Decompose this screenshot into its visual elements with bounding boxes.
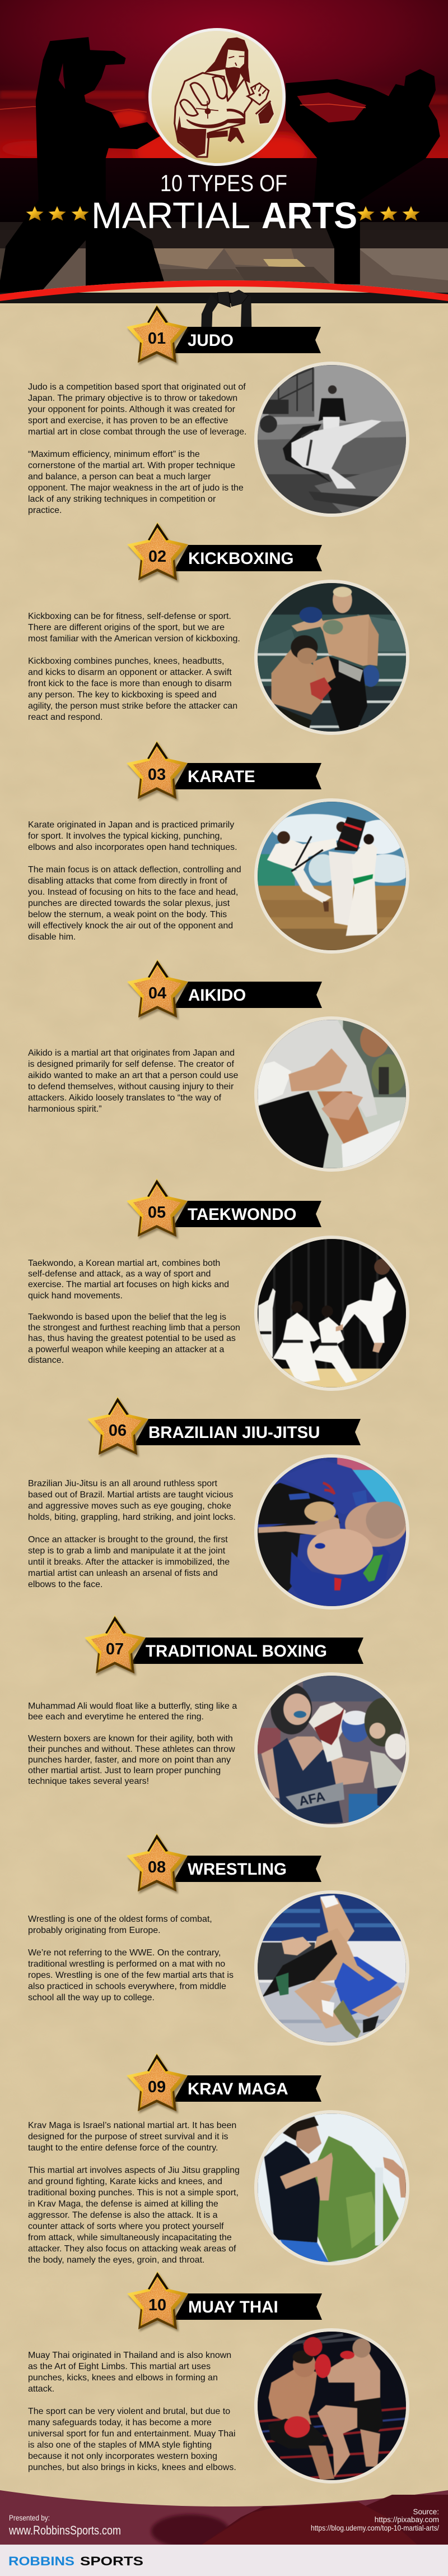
section 08 text: probably originating from Europe. (28, 1926, 161, 1935)
section 08 heading: WRESTLING (188, 1860, 287, 1879)
section 03 text: punches are directed towards the solar plexus, just (28, 899, 230, 908)
section 05 text: has, thus having the greatest potential to be used as (28, 1334, 236, 1343)
section 01 heading: JUDO (188, 331, 234, 350)
section 05 heading (127, 1178, 321, 1240)
section 08 heading (127, 1833, 321, 1894)
section 04 heading: 04 (148, 984, 166, 1002)
section 04 photo: aikido wrist lock (254, 1016, 409, 1172)
section 08 text: Wrestling is one of the oldest forms of combat, (28, 1914, 212, 1924)
section 03 photo: karate on beach (254, 798, 409, 954)
section 08 text: ropes. Wrestling is one of the few martial arts that is (28, 1971, 234, 1980)
section 05 text: distance. (28, 1356, 64, 1365)
section 01 text: your opponent for points. Although it was created for (28, 405, 235, 414)
section 03 heading (127, 741, 321, 802)
black belt band (0, 293, 448, 303)
section 09 text: This martial art involves aspects of Jiu Jitsu grappling (28, 2166, 240, 2175)
belt knot and tails (201, 290, 252, 327)
section 07 text: punches harder, faster, and more on point than any (28, 1755, 231, 1765)
section 03 text: disable him. (28, 932, 76, 942)
section 03 text: The main focus is on attack deflection, controlling and (28, 865, 241, 875)
section 07 text: Muhammad Ali would float like a butterfly, sting like a (28, 1701, 237, 1711)
parchment below curve (0, 280, 448, 306)
section 08 photo: wrestling takedown (254, 1890, 409, 2046)
section 09 text: counter attack of sorts where you protect yourself (28, 2222, 224, 2231)
section 06 text: elbows to the face. (28, 1580, 102, 1589)
section 02 text: and kicks to disarm an opponent or attacker. A swift (28, 668, 232, 677)
source credits (311, 2508, 439, 2532)
robbins sports logo: SPORTS (80, 2554, 143, 2568)
section 08 text: We’re not referring to the WWE. On the contrary, (28, 1948, 221, 1958)
section 10 text: is also one of the staples of MMA style fighting (28, 2440, 212, 2450)
section 05 heading: 05 (148, 1204, 166, 1222)
section 10 text: many safeguards today, it has become a more (28, 2418, 212, 2427)
section 03 heading: KARATE (188, 767, 255, 786)
section 08 heading: 08 (148, 1858, 166, 1876)
section 05 text: exercise. The martial art focuses on high kicks and (28, 1280, 229, 1289)
section 05 text: Taekwondo is based upon the belief that the leg is (28, 1312, 226, 1322)
section 06 text: step is to grab a limb and manipulate it at the joint (28, 1546, 225, 1556)
section 01 text: practice. (28, 506, 62, 515)
title line two: MARTIAL (91, 195, 250, 236)
section 07 photo: boxing bout: AFA (297, 1789, 326, 1809)
section 02 text: Kickboxing can be for fitness, self-defense or sport. (28, 612, 231, 621)
section 10 text (28, 2351, 236, 2472)
presented by: Presented by: (9, 2513, 50, 2522)
section 10 photo: muay thai clinch (254, 2328, 409, 2483)
stone floor (0, 222, 448, 302)
section 04 text: harmonious spirit.” (28, 1104, 102, 1114)
section 01 text: sport and exercise, it has proven to be an effective (28, 416, 228, 426)
section 08 text: also practiced in schools everywhere, from middle (28, 1982, 226, 1991)
section 08 text: school all the way up to college. (28, 1993, 155, 2002)
dark band (0, 158, 448, 225)
robbins sports logo (8, 2554, 143, 2568)
section 06 text (28, 1479, 236, 1589)
section 09 heading: 09 (148, 2078, 166, 2096)
section 09 text: traditional boxing punches. This is not a simple sport, (28, 2188, 239, 2198)
section 04 heading (127, 959, 322, 1020)
section 02 text: react and respond. (28, 713, 102, 722)
section 04 text: aikido wanted to make an art that a person could use (28, 1071, 238, 1080)
section 06 text: Once an attacker is brought to the ground, the first (28, 1535, 228, 1544)
section 04 text: is designed primarily for self defense. The creator of (28, 1060, 234, 1069)
section 10 text: The sport can be very violent and brutal, but due to (28, 2407, 230, 2416)
section 10 text: because it not only incorporates western boxing (28, 2452, 217, 2461)
section 07 text (28, 1701, 237, 1786)
source credits: https://pixabay.com (375, 2515, 439, 2524)
section 06 text: until it breaks. After the attacker is immobilized, the (28, 1557, 230, 1567)
section 01 heading (127, 304, 321, 366)
section 05 text: Taekwondo, a Korean martial art, combines both (28, 1259, 220, 1268)
section 04 text: attackers. Aikido loosely translates to “the way of (28, 1093, 221, 1103)
section 10 text: punches, but also brings in kicks, knees and elbows. (28, 2463, 236, 2472)
section 03 text: disabling attacks that come from directly in front of (28, 876, 227, 886)
section 10 text: punches, kicks, knees and elbows in forming an (28, 2373, 218, 2383)
title line two: ARTS (262, 195, 357, 236)
section 03 text: Karate originated in Japan and is practiced primarily (28, 820, 234, 830)
section 09 text: aggressor. The defense is also the attack. It is a (28, 2210, 218, 2220)
section 10 text: as the Art of Eight Limbs. This martial art uses (28, 2362, 211, 2371)
title line one: 10 TYPES OF (160, 170, 287, 196)
section 10 heading: MUAY THAI (188, 2298, 278, 2316)
section 02 text: agility, the person must strike before the attacker can (28, 701, 237, 711)
section 01 text: opponent. The major weakness in the art of judo is the (28, 483, 244, 493)
section 06 text: martial artist can unleash an arsenal of fists and (28, 1569, 218, 1578)
section 06 photo: jiu-jitsu grapple (254, 1454, 409, 1610)
section 05 text: self-defense and attack, as a way of sport and (28, 1269, 211, 1279)
section 01 text: and balance, a person can beat a much larger (28, 472, 211, 482)
section 06 heading (87, 1396, 361, 1458)
section 06 text: and aggressive moves such as eye gouging, choke (28, 1501, 231, 1511)
section 09 text: in Krav Maga, the defense is aimed at killing the (28, 2199, 218, 2209)
section 07 text: Western boxers are known for their agility, both with (28, 1734, 233, 1743)
section 01 text: martial art in close combat through the use of leverage. (28, 427, 246, 437)
header scene (0, 0, 448, 303)
section 01 text (28, 382, 246, 515)
section 01 text: cornerstone of the martial art. With proper technique (28, 461, 235, 470)
section 05 photo: taekwondo demo (254, 1236, 409, 1391)
section 02 text (28, 612, 240, 722)
section 03 text: you. Instead of focusing on hits to the face and head, (28, 887, 238, 897)
section 09 text: taught to the entire defense force of the country. (28, 2143, 218, 2153)
section 10 text: universal sport for fun and entertainment. Muay Thai (28, 2429, 236, 2439)
source credits: Source: (413, 2508, 439, 2516)
section 05 text: a powerful weapon while keeping an attacker at a (28, 1345, 224, 1354)
section 09 text: designed for the purpose of street survival and it is (28, 2132, 228, 2142)
section 07 text: bee each and everytime he entered the ring. (28, 1712, 204, 1722)
section 04 text (28, 1048, 238, 1114)
section 02 text: There are different origins of the sport, but we are (28, 623, 225, 632)
section 09 text: Krav Maga is Israel’s national martial art. It has been (28, 2121, 236, 2130)
section 09 text: the body, namely the eyes, groin, and throat. (28, 2255, 204, 2265)
section 01 text: “Maximum efficiency, minimum effort” is the (28, 450, 200, 459)
section 05 heading: TAEKWONDO (188, 1205, 296, 1224)
presented by: www.RobbinsSports.com (8, 2523, 121, 2537)
section 10 heading (127, 2271, 322, 2332)
section 06 text: holds, biting, grappling, hard striking, and joint locks. (28, 1513, 236, 1522)
fighter logo drawing (175, 38, 274, 157)
section 02 heading: 02 (148, 548, 166, 566)
gold stars right (357, 206, 419, 220)
section 07 text: their punches and without. These athletes can throw (28, 1745, 235, 1754)
title line two (91, 195, 357, 236)
section 10 heading: 10 (148, 2296, 166, 2314)
section 03 text: elbows and also incorporates open hand techniques. (28, 843, 237, 852)
section 09 photo: krav maga stance (254, 2110, 409, 2265)
section 09 text: and ground fighting, Karate kicks and knees, and (28, 2177, 222, 2186)
section 04 text: Aikido is a martial art that originates from Japan and (28, 1048, 235, 1058)
section 03 text: will effectively knock the air out of the opponent and (28, 921, 233, 931)
fighter silhouettes (0, 37, 440, 300)
section 06 heading: 06 (109, 1422, 127, 1440)
section 06 text: based out of Brazil. Martial artists are taught vicious (28, 1490, 233, 1500)
section 08 text: traditional wrestling is performed on a mat with no (28, 1959, 225, 1969)
section 06 text: Brazilian Jiu-Jitsu is an all around ruthless sport (28, 1479, 217, 1488)
section 09 heading: KRAV MAGA (188, 2080, 288, 2098)
section 02 heading (127, 522, 322, 583)
silhouette gaps (59, 63, 366, 123)
section 01 text: Judo is a competition based sport that originated out of (28, 382, 246, 392)
section 02 text: any person. The key to kickboxing is speed and (28, 690, 217, 700)
section 07 heading: TRADITIONAL BOXING (146, 1642, 327, 1661)
section 05 text: the strongest and furthest reaching limb that a person (28, 1323, 240, 1333)
section 05 text: quick hand movements. (28, 1291, 123, 1301)
section 04 text: to defend themselves, without causing injury to their (28, 1082, 234, 1092)
section 09 text: from attack, while simultaneously incapacitating the (28, 2233, 232, 2242)
section 01 text: lack of any striking techniques in competition or (28, 494, 216, 504)
section 02 photo: kickboxing (254, 580, 409, 735)
section 04 heading: AIKIDO (188, 986, 246, 1005)
section 06 heading: BRAZILIAN JIU-JITSU (148, 1423, 320, 1442)
section 03 heading: 03 (148, 766, 166, 784)
robbins sports logo: ROBBINS (8, 2554, 74, 2568)
section 03 text: below the sternum, a weak point on the body. This (28, 910, 227, 919)
red sky (0, 0, 448, 158)
section 07 heading (85, 1615, 363, 1676)
section 09 heading (127, 2053, 321, 2114)
section 10 text: Muay Thai originated in Thailand and is also known (28, 2351, 231, 2360)
section 03 text: for sport. It involves the typical kicking, punching, (28, 831, 222, 841)
section 02 text: front kick to the face is more than enough to disarm (28, 679, 232, 688)
section 10 text: attack. (28, 2384, 54, 2394)
section 09 text: attacker. They also focus on attacking weak areas of (28, 2244, 236, 2254)
section 01 photo: judo throw (254, 362, 409, 517)
section 09 text (28, 2121, 240, 2265)
section 07 heading: 07 (106, 1640, 124, 1658)
section 08 text (28, 1914, 234, 2002)
section 07 text: technique takes several years! (28, 1777, 149, 1786)
footer panel (0, 2490, 448, 2576)
section 02 text: most familiar with the American version of kickboxing. (28, 634, 240, 644)
section 01 heading: 01 (148, 330, 166, 348)
section 01 text: Japan. The primary objective is to throw or takedown (28, 394, 237, 403)
section 07 photo: boxing bout (254, 1672, 409, 1828)
red curved border (0, 280, 448, 301)
clouds (0, 84, 448, 170)
gold stars left (26, 206, 88, 220)
logo oval (148, 28, 286, 166)
section 02 text: Kickboxing combines punches, knees, headbutts, (28, 656, 224, 666)
presented by (8, 2513, 121, 2537)
section 03 text (28, 820, 241, 942)
section 05 text (28, 1259, 240, 1365)
section 07 text: other martial artist. Just to learn proper punching (28, 1766, 221, 1775)
section 02 heading: KICKBOXING (188, 549, 293, 568)
